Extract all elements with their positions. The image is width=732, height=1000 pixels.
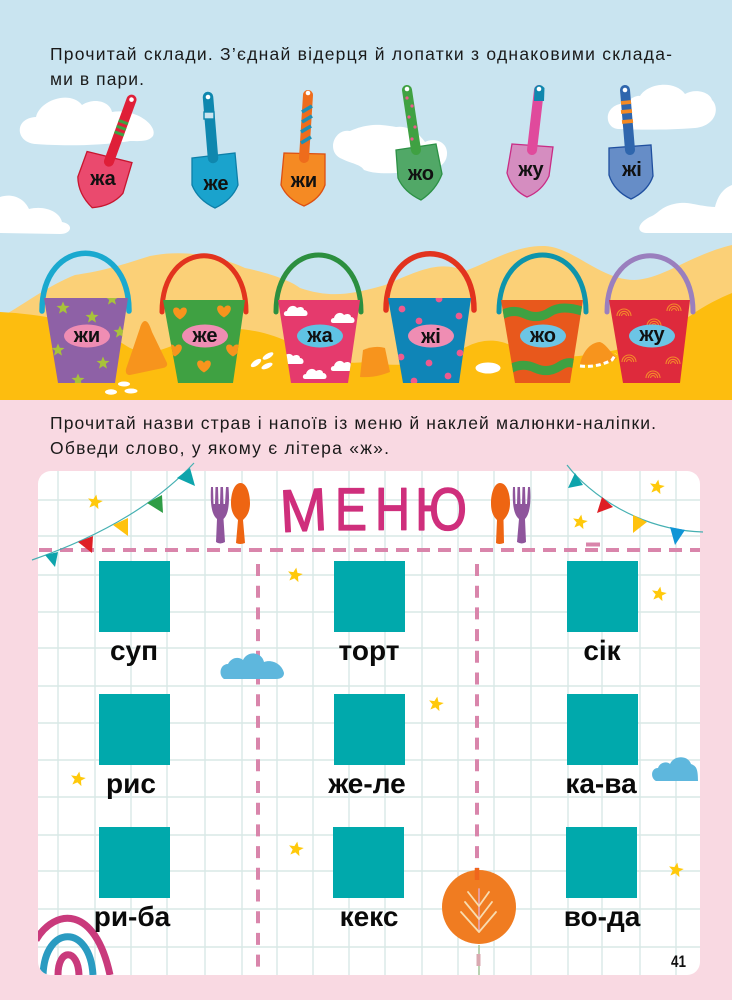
clouds — [0, 85, 732, 234]
sand castles — [126, 321, 617, 377]
instruction text 2: Прочитай назви страв і напоїв із меню й наклей малюнки-наліпки. — [50, 413, 656, 433]
bucket: жи — [42, 253, 129, 386]
shovel: жа: жа — [89, 168, 117, 190]
word labels: торт — [339, 635, 399, 666]
title: МЕНЮ: М — [278, 476, 329, 545]
stars — [70, 478, 685, 878]
icon: rainbow — [36, 918, 110, 975]
sky background — [0, 0, 732, 400]
shovel: же: же — [202, 173, 229, 195]
shovel: жу — [507, 85, 553, 197]
page number: 41 — [671, 952, 686, 971]
bunting right — [567, 465, 703, 545]
bucket: жа: жа — [306, 325, 334, 347]
bucket: жі: жі — [420, 326, 441, 348]
pebbles — [105, 351, 616, 395]
bucket: жа — [276, 255, 361, 383]
word labels: ка-ва — [565, 768, 637, 799]
title: МЕНЮ — [278, 476, 467, 545]
bucket: жу: жу — [638, 324, 666, 346]
dashed dividers — [39, 544, 700, 968]
bunting left — [32, 463, 195, 567]
title: МЕНЮ: Ю — [415, 476, 467, 543]
shovel: жи — [281, 91, 325, 206]
word labels: рис — [106, 768, 156, 799]
instruction text 2: Обведи слово, у якому є літера «ж». — [50, 438, 389, 458]
shovel: жо — [396, 87, 442, 200]
icon: right spoon and fork — [491, 483, 530, 544]
word labels: во-да — [564, 901, 641, 932]
word labels — [94, 635, 641, 932]
icon: blue cloud centre — [221, 653, 284, 679]
bucket: жі — [386, 254, 474, 384]
title: МЕНЮ: Е — [335, 476, 367, 543]
instruction text 1: ми в пари. — [50, 69, 144, 89]
bucket: же — [162, 256, 246, 383]
sticker squares — [99, 561, 638, 898]
bucket: жи: жи — [73, 325, 100, 347]
shovel: жі — [609, 88, 653, 199]
sand hills — [0, 245, 732, 400]
icon: orange tree — [442, 868, 516, 975]
shovel: жу: жу — [517, 159, 545, 181]
icon: left fork and spoon — [211, 483, 250, 544]
bucket: жо: жо — [529, 325, 556, 347]
bucket: же: же — [191, 325, 218, 347]
instruction text 1 — [50, 44, 672, 89]
icon: blue cloud right — [652, 757, 698, 781]
shovel: жа — [70, 89, 155, 216]
shovel: жі: жі — [621, 159, 642, 181]
shovel: жи: жи — [290, 170, 317, 192]
instruction text 2 — [50, 413, 656, 458]
word labels: кекс — [340, 901, 398, 932]
word labels: суп — [110, 635, 158, 666]
word labels: же-ле — [327, 768, 406, 799]
bucket: жу — [607, 256, 693, 383]
pink page background — [0, 400, 732, 1000]
word labels: сік — [583, 635, 622, 666]
instruction text 1: Прочитай склади. З’єднай відерця й лопатки з однаковими склада- — [50, 44, 672, 64]
title: МЕНЮ: Н — [375, 476, 410, 543]
panel: menu card — [32, 463, 703, 975]
shovel: жо: жо — [407, 163, 434, 185]
word labels: ри-ба — [94, 901, 171, 932]
shovel: же — [192, 95, 238, 208]
bucket: жо — [499, 255, 586, 383]
